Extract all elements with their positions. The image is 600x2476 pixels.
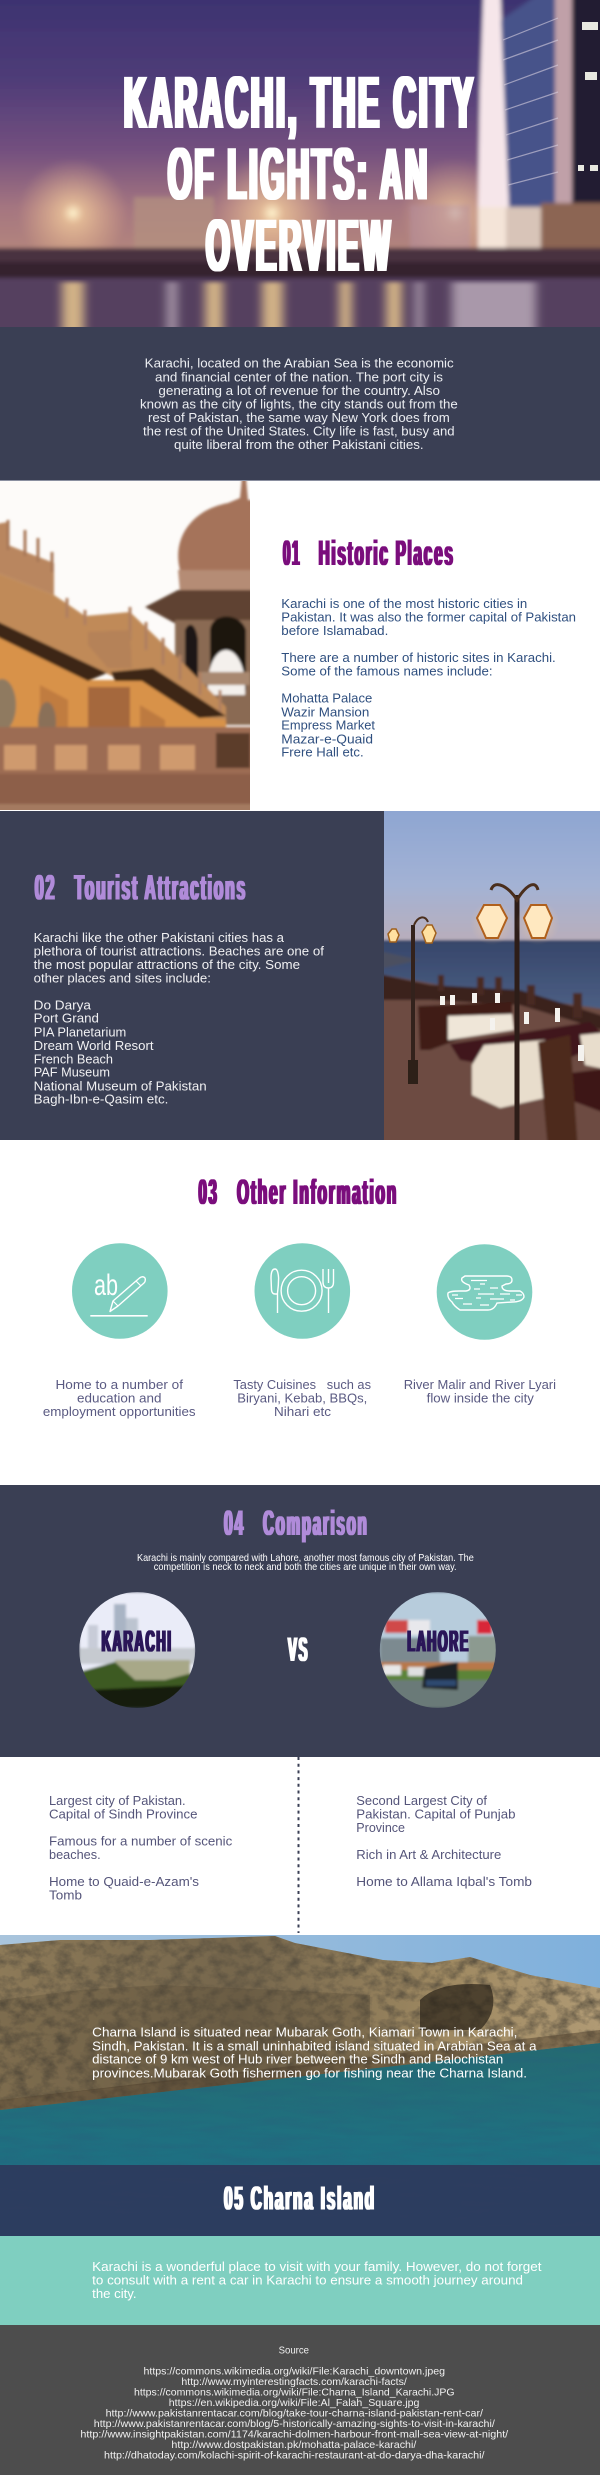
panel: closing note [0,2236,600,2325]
Lahore facts: Second Largest City of [356,1793,487,1808]
lower orange wall [0,632,226,735]
Karachi facts: beaches. [49,1847,101,1862]
title band [0,2165,600,2236]
heading 01 [283,534,455,573]
intro text 04 [137,1552,474,1573]
source links: https://commons.wikimedia.org/wiki/File:Charna_Island_Karachi.JPG [134,2387,455,2399]
body text 01: There are a number of historic sites in Karachi. [281,650,556,665]
Charna body text: provinces.Mubarak Goth fishermen go for fishing near the Charna Island. [92,2065,527,2080]
Lahore facts: Pakistan. Capital of Punjab [356,1806,516,1821]
body text 02: PAF Museum [34,1065,110,1080]
intro text: known as the city of lights, the city stands out from the [140,397,458,412]
intro text: Karachi, located on the Arabian Sea is the economic [145,356,454,371]
lower balustrade [0,727,260,774]
caption: cuisine: Biryani, Kebab, BBQs, [237,1391,367,1406]
heading 02: 02 [35,868,56,907]
icon: writing pencil [72,1243,168,1339]
closing text: the city. [92,2286,137,2301]
body text 01: Frere Hall etc. [281,745,364,760]
Karachi facts: Famous for a number of scenic [49,1834,233,1849]
lamp posts [514,895,520,1140]
panel: 02 tourist attractions [0,801,600,1150]
body text 01: Mazar-e-Quaid [281,731,373,746]
intro text [140,356,458,452]
body text 02 [34,930,324,1107]
heading 03: 03 [198,1173,218,1212]
source links: https://en.wikipedia.org/wiki/File:Al_Falah_Square.jpg [169,2397,420,2409]
Charna body text [92,2025,537,2080]
Lahore facts: Rich in Art & Architecture [356,1847,501,1862]
intro text: quite liberal from the other Pakistani cities. [174,437,424,452]
heading 04: 04 [224,1504,245,1543]
Karachi facts: Tomb [49,1887,82,1902]
body text 01: Wazir Mansion [281,704,369,719]
Lahore facts: Province [356,1820,405,1835]
panel: sources [0,2325,600,2475]
title [124,61,476,287]
upper wall [0,570,226,720]
Karachi facts: Home to Quaid-e-Azam's [49,1874,200,1889]
Charna body text: Sindh, Pakistan. It is a small uninhabited island situated in Arabian Sea at a [92,2038,537,2053]
body text 02: Port Grand [34,1011,99,1026]
caption: education: employment opportunities [43,1404,196,1419]
body text 02: the most popular attractions of the city. Some [34,957,300,972]
body text 01: Empress Market [281,718,375,733]
body text 02: National Museum of Pakistan [34,1078,207,1093]
icon: writing pencil: ab [94,1269,118,1302]
body text 01: Karachi is one of the most historic cities in [281,596,527,611]
panel: 05 Charna Island: 05 Charna Island [224,2179,376,2216]
body text 01: Mohatta Palace [281,691,372,706]
source links: https://commons.wikimedia.org/wiki/File:Karachi_downtown.jpeg [144,2366,445,2378]
intro text 04: Karachi is mainly compared with Lahore, another most famous city of Pakistan. The [137,1552,474,1564]
dark eaves [0,618,107,681]
photo circle: Lahore [379,1592,498,1708]
caption: rivers [404,1377,556,1406]
intro text: generating a lot of revenue for the country. Also [158,383,440,398]
source heading: Source [279,2344,309,2356]
photo circle: Karachi: KARACHI [102,1624,173,1659]
heading 02 [35,868,247,907]
hero night skyline photo [0,0,600,338]
intro text: the rest of the United States. City life is fast, busy and [143,424,455,439]
body text 02: plethora of tourist attractions. Beaches are one of [34,943,324,958]
body text 02: PIA Planetarium [34,1024,126,1039]
closing text [92,2259,542,2301]
caption: cuisine: Nihari etc [274,1404,332,1419]
panel: 02 tourist attractions: Tourist Attractions [74,868,247,907]
Charna body text: distance of 9 km west of Hub river between the Sindh and Balochistan [92,2052,503,2067]
source links: http://www.pakistanrentacar.com/blog/take-tour-charna-island-pakistan-rent-car/ [106,2408,483,2420]
body text 02: Bagh-Ibn-e-Qasim etc. [34,1092,168,1107]
heading 03 [198,1173,398,1212]
closing text: to consult with a rent a car in Karachi to ensure a smooth journey around [92,2273,523,2288]
Karachi facts [49,1793,233,1902]
body text 02: Dream World Resort [34,1038,154,1053]
source links: http://www.myinterestingfacts.com/karachi-facts/ [181,2376,407,2388]
Lahore facts: Home to Allama Iqbal's Tomb [356,1874,532,1889]
body text 02: French Beach [34,1051,113,1066]
Karachi facts: Capital of Sindh Province [49,1806,198,1821]
body text 02: Do Darya [34,997,92,1012]
photo: Charna Island cliffs and sea [0,1935,600,2236]
intro text: rest of Pakistan, the same way New York does from [148,410,450,425]
caption: rivers: River Malir and River Lyari [404,1377,556,1392]
dome [176,481,250,572]
Lahore facts [356,1793,532,1889]
panel: hero photo with title [0,0,600,338]
photo: Do Darya restaurant [374,801,600,1150]
icon: river [437,1244,532,1340]
caption: education: Home to a number of [56,1377,183,1392]
source links: http://www.pakistanrentacar.com/blog/5-historically-amazing-sights-to-visit-in-karachi/ [94,2418,495,2430]
icon: plate and cutlery [254,1243,350,1339]
body text 02: Karachi like the other Pakistani cities has a [34,930,285,945]
panel: 04 comparison: VS [288,1631,309,1669]
body text 01: before Islamabad. [281,623,388,638]
body text 01: Pakistan. It was also the former capital of Pakistan [281,610,576,625]
caption: cuisine: Tasty Cuisines such as [233,1377,371,1392]
heading 04 [224,1504,368,1543]
intro text 04: competition is neck to neck and both the cities are unique in their own way. [154,1561,457,1573]
upper left balustrade [0,522,54,595]
photo circle: Karachi [79,1592,196,1708]
source links [80,2366,508,2462]
caption: rivers: flow inside the city [427,1391,534,1406]
caption: education [43,1377,196,1419]
heading 01: 01 [283,534,301,573]
panel: 03 other information: Other Information [237,1173,398,1212]
intro text: and financial center of the nation. The port city is [155,369,444,384]
panel: introduction [0,327,600,480]
Karachi facts: Largest city of Pakistan. [49,1793,186,1808]
body text 01 [281,596,576,760]
panel: 05 Charna Island [0,1935,600,2236]
source links: http://dhatoday.com/kolachi-spirit-of-karachi-restaurant-at-do-darya-dha-karachi/ [104,2450,485,2462]
panel: comparison lists [0,1757,600,1935]
photo circle: Lahore: LAHORE [407,1624,470,1659]
panel: 03 other information [0,1140,600,1485]
body text 01: Some of the famous names include: [281,664,492,679]
panel: 01 historic places [0,478,600,814]
Charna body text: Charna Island is situated near Mubarak Goth, Kiamari Town in Karachi, [92,2025,517,2040]
source links: http://www.insightpakistan.com/1174/karachi-dolmen-harbour-front-mall-sea-view-at-night/ [80,2429,508,2441]
panel: 04 comparison: Comparison [263,1504,368,1543]
body text 02: other places and sites include: [34,970,211,985]
source links: http://www.dostpakistan.pk/mohatta-palace-karachi/ [171,2439,416,2451]
photo: Mohatta Palace [0,478,265,814]
caption: cuisine [233,1377,371,1419]
panel: 04 comparison [0,1485,600,1757]
caption: education: education and [77,1391,162,1406]
closing text: Karachi is a wonderful place to visit with your family. However, do not forget [92,2259,542,2274]
